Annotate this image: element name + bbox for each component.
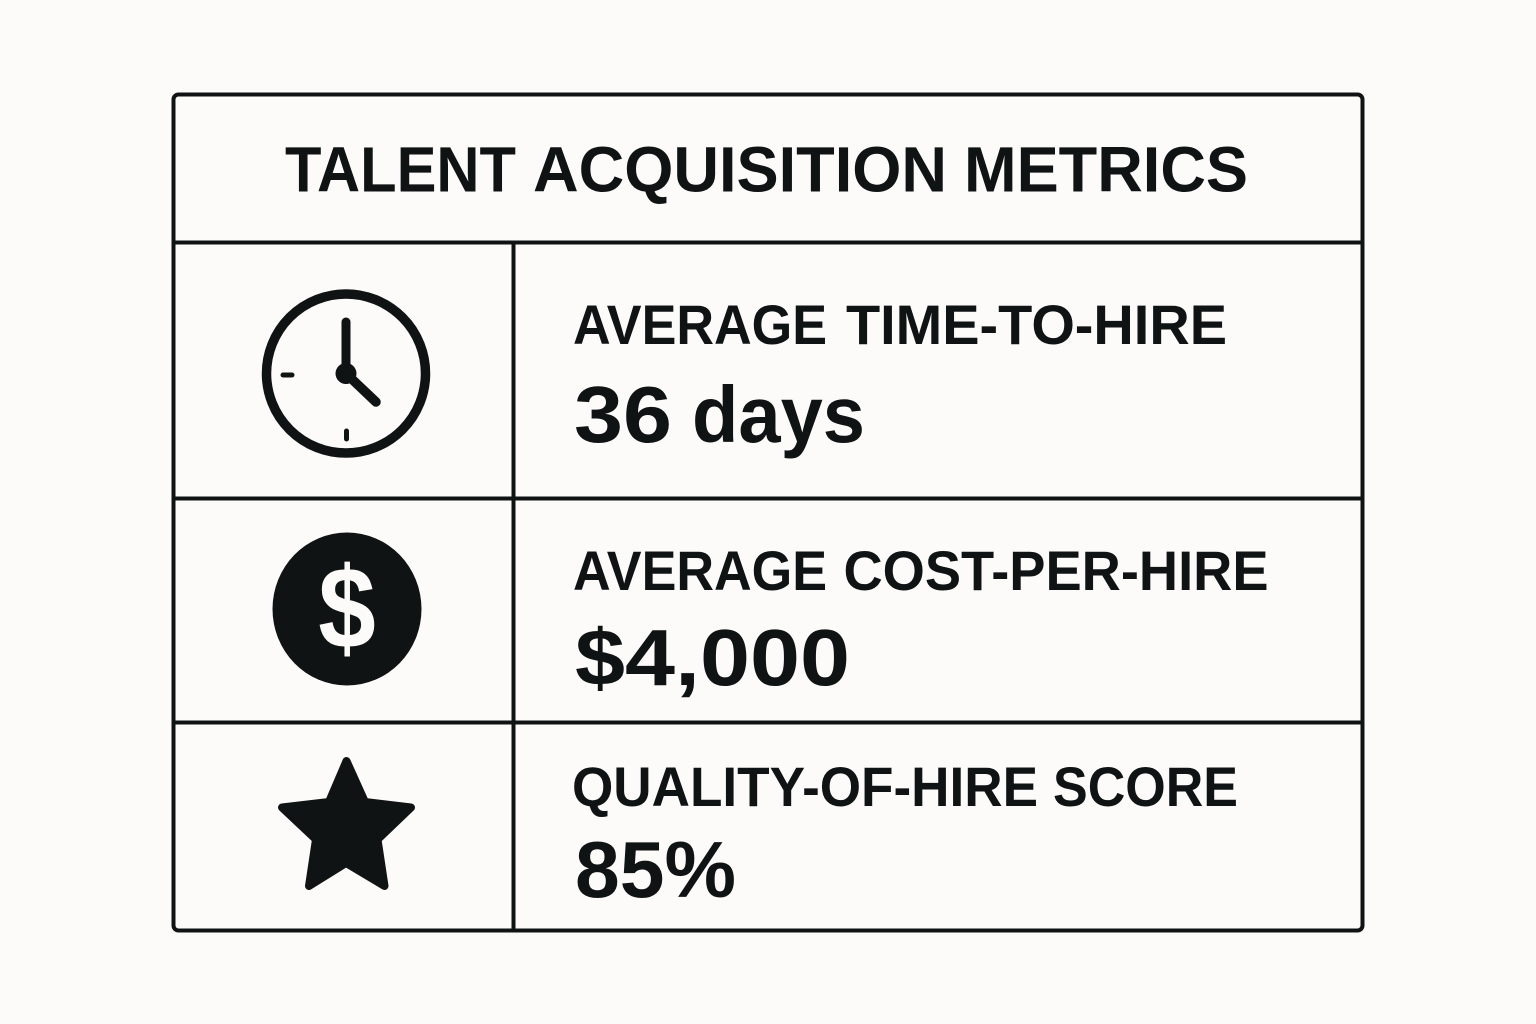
value: 85%: 85% [575, 825, 736, 914]
icon: star [282, 761, 411, 886]
table frame [174, 94, 1362, 930]
title: ACQUISITION [533, 134, 947, 206]
value: $4,000: $4,000 [575, 613, 850, 702]
label: quality-of-hire score: SCORE [1053, 755, 1238, 818]
row: quality-of-hire score [282, 755, 1238, 914]
row: average cost-per-hire [272, 532, 1268, 702]
label: average time-to-hire: AVERAGE [573, 293, 827, 356]
row: average time-to-hire [266, 293, 1227, 459]
value: 36 days: days [692, 370, 865, 459]
label: average time-to-hire: TIME-TO-HIRE [846, 293, 1227, 356]
label: average cost-per-hire: AVERAGE [573, 539, 827, 602]
icon: clock [266, 294, 426, 453]
label: quality-of-hire score: QUALITY-OF-HIRE [572, 755, 1038, 818]
icon: dollar coin [272, 532, 422, 686]
title: TALENT [285, 134, 516, 206]
icon: dollar coin: $ [318, 544, 376, 673]
value: 36 days: 36 [574, 370, 672, 459]
title: METRICS [964, 134, 1248, 206]
label: average cost-per-hire: COST-PER-HIRE [844, 539, 1268, 602]
